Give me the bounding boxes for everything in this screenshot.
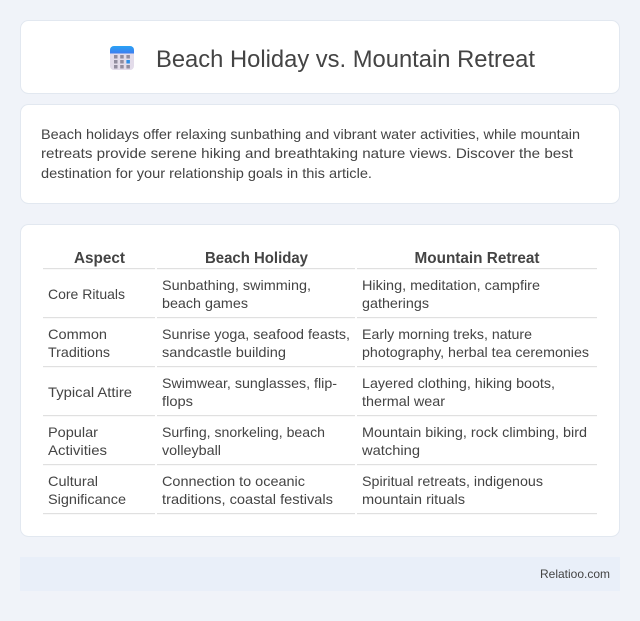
row: cultural significance: Cultural (48, 473, 98, 489)
row: popular activities: Activities (48, 442, 107, 458)
footer bar (20, 557, 620, 591)
title: Beach Holiday vs. Mountain Retreat (156, 46, 535, 73)
panel: title header (20, 20, 620, 94)
intro text: Beach holidays offer relaxing sunbathing and vibrant water activities, while mountain (41, 126, 580, 142)
row: core rituals: gatherings (362, 295, 429, 311)
row: popular activities: Popular (48, 424, 98, 440)
row: common traditions: Early morning treks, nature (362, 326, 532, 342)
intro text: retreats provide serene hiking and breathtaking nature views. Discover the best (41, 145, 573, 161)
row: cultural significance: Connection to oceanic (162, 473, 305, 489)
row: popular activities: Mountain biking, rock climbing, bird (362, 424, 587, 440)
table header row: Mountain Retreat (414, 250, 540, 267)
row: cultural significance: traditions, coastal festivals (162, 491, 333, 507)
row: typical attire: flops (162, 393, 193, 409)
panel: comparison table (20, 224, 620, 536)
row: cultural significance: Significance (48, 491, 126, 507)
table header row (74, 250, 540, 267)
icon: calendar (110, 46, 134, 70)
row: popular activities: watching (361, 442, 420, 458)
panel: introduction (20, 104, 620, 204)
row: core rituals: beach games (162, 295, 248, 311)
row: common traditions: Sunrise yoga, seafood feasts, (162, 326, 350, 342)
row: popular activities (48, 424, 587, 458)
row: common traditions: photography, herbal tea ceremonies (362, 344, 589, 360)
row: common traditions: Traditions (48, 344, 110, 360)
row: cultural significance (48, 473, 543, 507)
row: popular activities: Surfing, snorkeling, beach (162, 424, 325, 440)
row: typical attire: Typical Attire (48, 384, 132, 400)
intro text (41, 126, 580, 181)
row: typical attire (48, 375, 555, 409)
row: common traditions (48, 326, 589, 360)
row: typical attire: Layered clothing, hiking boots, (362, 375, 555, 391)
row: core rituals: Hiking, meditation, campfire (362, 277, 540, 293)
row: cultural significance: Spiritual retreats, indigenous (362, 473, 543, 489)
row: typical attire: thermal wear (362, 393, 445, 409)
footer credit: Relatioo.com (540, 567, 610, 581)
table header row: Beach Holiday (205, 250, 308, 267)
row: common traditions: sandcastle building (162, 344, 286, 360)
row: core rituals: Sunbathing, swimming, (162, 277, 311, 293)
intro text: destination for your relationship goals in this article. (41, 165, 372, 181)
row: popular activities: volleyball (162, 442, 221, 458)
row: common traditions: Common (48, 326, 107, 342)
row: core rituals: Core Rituals (48, 286, 125, 302)
table header row: Aspect (74, 250, 126, 267)
row: typical attire: Swimwear, sunglasses, flip- (162, 375, 337, 391)
row: cultural significance: mountain rituals (362, 491, 465, 507)
row: core rituals (48, 277, 540, 311)
